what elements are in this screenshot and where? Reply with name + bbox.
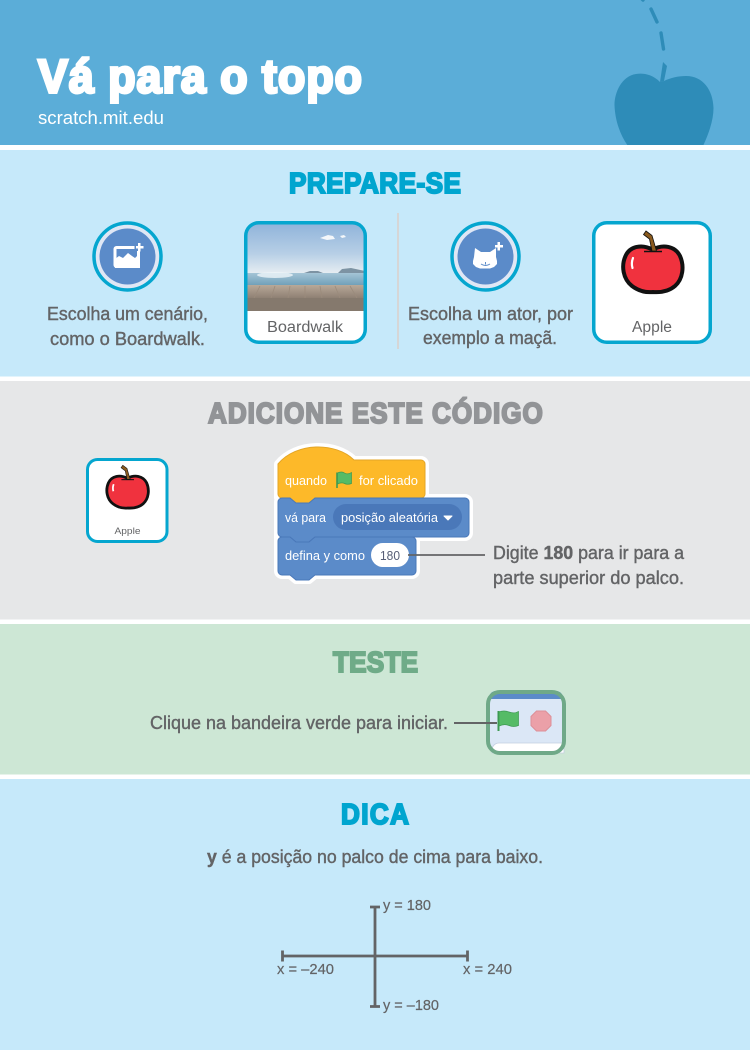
panel: teste xyxy=(0,624,750,774)
chart: stage coordinates xyxy=(277,897,512,1014)
heading: prepare-se: PREPARE-SE xyxy=(289,167,461,199)
block: set y to 180: 180 xyxy=(380,548,400,563)
card: small apple sprite xyxy=(88,460,167,542)
icon: apple silhouette with dashed path xyxy=(614,0,714,146)
callout: type 180 xyxy=(493,543,685,588)
block: go to random position xyxy=(278,498,469,542)
card: boardwalk backdrop xyxy=(246,223,365,342)
card: small apple sprite: Apple xyxy=(114,526,140,537)
chart: stage coordinates: x = 240 xyxy=(463,961,512,978)
text: choose sprite: Escolha um ator, por xyxy=(408,304,573,324)
heading: adicione este código: ADICIONE ESTE CÓDIGO xyxy=(208,397,543,429)
text: click green flag: Clique na bandeira verde para iniciar. xyxy=(150,713,448,733)
panel: prepare-se xyxy=(0,150,750,376)
text: choose backdrop: Escolha um cenário, xyxy=(47,304,208,324)
callout: type 180: Digite 180 para ir para a xyxy=(493,543,685,563)
block: when flag clicked: for clicado xyxy=(359,473,418,488)
icon: choose sprite button xyxy=(452,223,519,290)
heading: teste: TESTE xyxy=(333,646,418,678)
card: apple sprite: Apple xyxy=(632,319,672,336)
heading: dica: DICA xyxy=(341,798,409,830)
chart: stage coordinates: y = –180 xyxy=(383,997,439,1014)
connector line xyxy=(454,722,497,724)
text: choose backdrop xyxy=(47,304,208,349)
icon: green flag xyxy=(498,711,518,731)
icon: choose backdrop button xyxy=(94,223,161,290)
icon: red apple xyxy=(623,231,683,292)
callout: type 180: parte superior do palco. xyxy=(493,568,684,588)
stage controls xyxy=(488,691,564,753)
title: Vá para o topo xyxy=(38,50,362,103)
text: choose sprite: exemplo a maçã. xyxy=(423,328,557,348)
text: choose sprite xyxy=(408,304,573,348)
block: go to random position: vá para xyxy=(285,510,327,525)
connector line xyxy=(408,554,485,556)
chart: stage coordinates: x = –240 xyxy=(277,961,334,978)
icon: stop sign xyxy=(531,711,551,731)
panel: header xyxy=(0,0,750,146)
block: set y to 180 xyxy=(278,537,416,580)
card: boardwalk backdrop: Boardwalk xyxy=(267,319,343,336)
panel: adicione este código xyxy=(0,381,750,620)
text: y explanation: y é a posição no palco de cima para baixo. xyxy=(207,847,543,867)
block: set y to 180: defina y como xyxy=(285,548,365,563)
block: go to random position: posição aleatória xyxy=(341,510,439,525)
chart: stage coordinates: y = 180 xyxy=(383,897,431,914)
block: when flag clicked xyxy=(278,447,425,503)
text: choose backdrop: como o Boardwalk. xyxy=(50,329,205,349)
panel: dica xyxy=(0,779,750,1050)
block: when flag clicked: quando xyxy=(285,473,327,488)
card: apple sprite xyxy=(594,223,710,342)
code blocks xyxy=(278,447,469,580)
subtitle url: scratch.mit.edu xyxy=(38,108,164,128)
